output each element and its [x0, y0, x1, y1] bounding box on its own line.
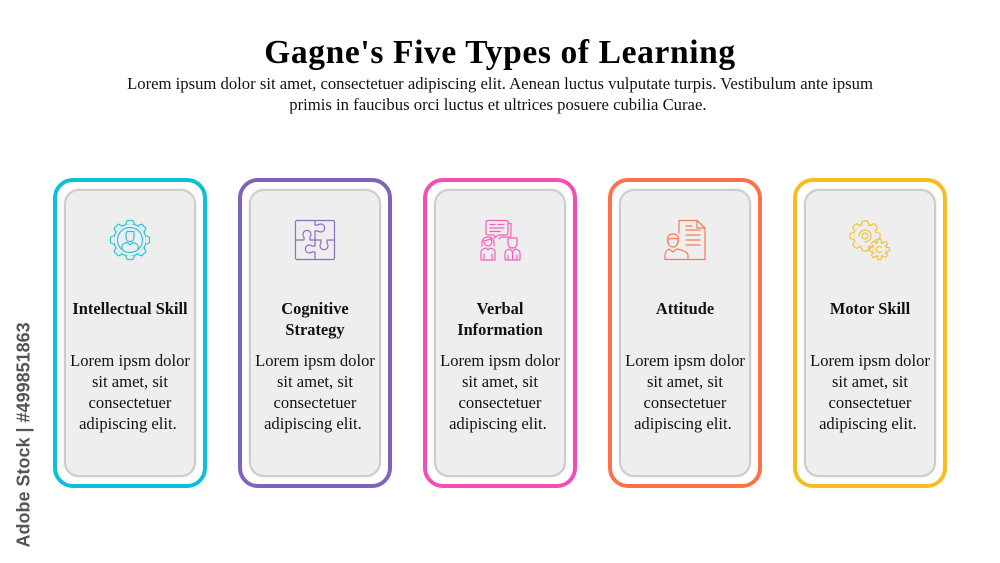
- subtitle text: [127, 74, 873, 114]
- body text: consectetuer: [644, 393, 726, 412]
- subtitle text: Lorem ipsum dolor sit amet, consectetuer adipiscing elit. Aenean luctus vulputate turpis. Vestibulum ante ipsum: [127, 74, 873, 93]
- body text: adipiscing elit.: [634, 414, 732, 433]
- body text: Lorem ipsm dolor: [625, 351, 745, 370]
- body text: sit amet, sit: [647, 372, 723, 391]
- icon: puzzle: [294, 220, 336, 260]
- icon: gear with person: [110, 220, 150, 260]
- body text: consectetuer: [829, 393, 911, 412]
- card frame: [53, 178, 207, 488]
- heading: Strategy: [285, 320, 345, 339]
- body text: adipiscing elit.: [819, 414, 917, 433]
- icon: two people talking: [480, 220, 521, 261]
- icon: gears: [849, 220, 890, 260]
- heading: Motor Skill: [830, 299, 910, 318]
- body text: adipiscing elit.: [449, 414, 547, 433]
- card frame: [608, 178, 762, 488]
- heading: [281, 299, 349, 339]
- body text: [440, 351, 560, 433]
- body text: sit amet, sit: [462, 372, 538, 391]
- card frame: [238, 178, 392, 488]
- title: Gagne's Five Types of Learning: [264, 34, 736, 71]
- body text: [625, 351, 745, 433]
- body text: Lorem ipsm dolor: [70, 351, 190, 370]
- body text: consectetuer: [89, 393, 171, 412]
- body text: sit amet, sit: [277, 372, 353, 391]
- subtitle text: primis in faucibus orci luctus et ultrices posuere cubilia Curae.: [289, 95, 707, 114]
- heading: Cognitive: [281, 299, 349, 318]
- heading: [457, 299, 543, 339]
- body text: adipiscing elit.: [79, 414, 177, 433]
- icon: person with document: [664, 220, 706, 260]
- heading: Attitude: [656, 299, 714, 318]
- body text: [70, 351, 190, 433]
- body text: [255, 351, 375, 433]
- body text: sit amet, sit: [92, 372, 168, 391]
- body text: consectetuer: [459, 393, 541, 412]
- card frame: [423, 178, 577, 488]
- heading: Intellectual Skill: [72, 299, 188, 318]
- body text: consectetuer: [274, 393, 356, 412]
- stock id vertical label: Adobe Stock | #499851863: [14, 322, 34, 548]
- heading: Verbal: [477, 299, 523, 318]
- heading: Information: [457, 320, 543, 339]
- body text: [810, 351, 930, 433]
- body text: Lorem ipsm dolor: [440, 351, 560, 370]
- card frame: [793, 178, 947, 488]
- body text: Lorem ipsm dolor: [810, 351, 930, 370]
- body text: Lorem ipsm dolor: [255, 351, 375, 370]
- body text: adipiscing elit.: [264, 414, 362, 433]
- body text: sit amet, sit: [832, 372, 908, 391]
